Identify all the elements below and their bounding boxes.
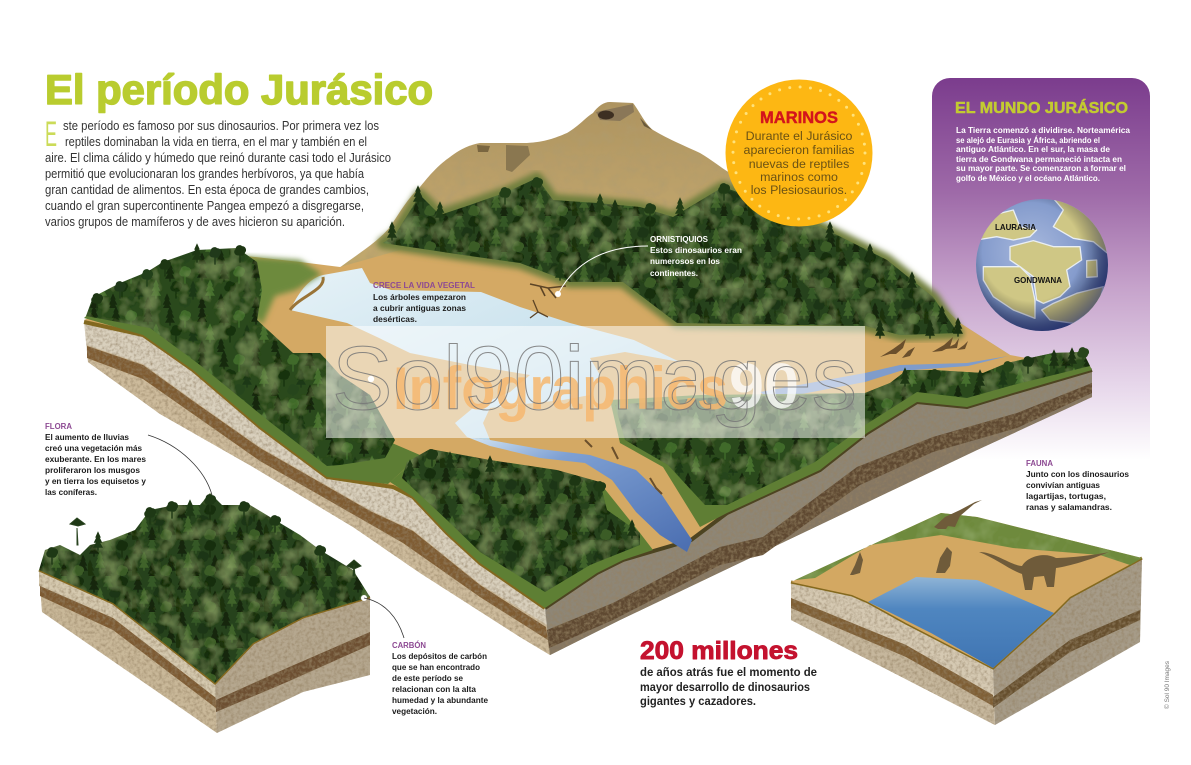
badge text: Durante el Jurásico bbox=[746, 129, 852, 143]
callout: ornistiquios bbox=[555, 234, 742, 297]
callout: 200 millones: gigantes y cazadores. bbox=[640, 694, 756, 708]
panel text block: se alejó de Eurasia y África, abriendo el bbox=[956, 135, 1100, 145]
badge text: marinos como bbox=[760, 170, 838, 184]
globe label: laurasia: LAURASIA bbox=[995, 222, 1036, 232]
callout: crece la vida vegetal bbox=[373, 280, 476, 324]
grass back left bbox=[240, 256, 322, 325]
panel: el mundo jurásico bbox=[932, 78, 1150, 460]
callout: carbón bbox=[364, 598, 488, 716]
callout: flora: las coníferas. bbox=[45, 487, 97, 497]
block right face bbox=[993, 558, 1142, 725]
panel text block: su mayor parte. Se comenzaron a formar el bbox=[956, 163, 1126, 173]
callout: carbón: Los depósitos de carbón bbox=[392, 651, 487, 661]
callout: 200 millones: 200 millones bbox=[640, 637, 798, 665]
block left face bbox=[39, 572, 217, 733]
callout: ornistiquios: numerosos en los bbox=[650, 256, 720, 266]
watermark white number: 90 bbox=[729, 350, 799, 422]
block top surface bbox=[791, 513, 1142, 668]
badge text: aparecieron familias bbox=[744, 143, 854, 157]
intro text block: aire. El clima cálido y húmedo que reinó durante casi todo el Jurásico bbox=[45, 150, 391, 165]
callout: flora: FLORA bbox=[45, 421, 73, 431]
callout: flora: y en tierra los equisetos y bbox=[45, 476, 146, 486]
block right face bbox=[215, 597, 370, 733]
callout: fauna: convivían antiguas bbox=[1026, 480, 1100, 490]
callout: carbón: vegetación. bbox=[392, 706, 437, 716]
intro text block: cuando el gran supercontinente Pangea empezó a disgregarse, bbox=[45, 198, 364, 213]
callout: carbón: relacionan con la alta bbox=[392, 684, 476, 694]
callout: fauna: ranas y salamandras. bbox=[1026, 502, 1112, 512]
badge heading: MARINOS bbox=[760, 109, 838, 127]
intro text block: reptiles dominaban la vida en tierra, en el mar y también en el bbox=[65, 134, 367, 149]
intro text block bbox=[45, 115, 391, 229]
block forest top bbox=[39, 493, 370, 683]
callout: ornistiquios: ORNISTIQUIOS bbox=[650, 234, 708, 244]
intro text block: ste período es famoso por sus dinosaurios. Por primera vez los bbox=[63, 118, 379, 133]
lake edge bank bbox=[290, 277, 323, 310]
marinos badge bbox=[726, 80, 872, 226]
river bbox=[467, 437, 692, 552]
callout: flora: proliferaron los musgos bbox=[45, 465, 140, 475]
callout: carbón: de este período se bbox=[392, 673, 463, 683]
copyright: © Sol 90 Images bbox=[1163, 660, 1171, 709]
callout: ornistiquios: Estos dinosaurios eran bbox=[650, 245, 742, 255]
callout: carbón: humedad y la abundante bbox=[392, 695, 488, 705]
panel text block bbox=[956, 125, 1130, 183]
panel heading: EL MUNDO JURÁSICO bbox=[955, 98, 1128, 117]
title: El período Jurásico bbox=[45, 66, 433, 113]
watermark orange word: Infographics bbox=[393, 355, 728, 422]
drop cap: E bbox=[45, 115, 57, 154]
block lake bbox=[868, 577, 1054, 668]
dinosaurs on the plain bbox=[530, 284, 968, 494]
callout: fauna: Junto con los dinosaurios bbox=[1026, 469, 1129, 479]
watermark bbox=[326, 326, 865, 438]
callout: ornistiquios: continentes. bbox=[650, 268, 698, 278]
intro text block: permitió que evolucionaran los grandes herbívoros, ya que había bbox=[45, 166, 365, 181]
panel text block: La Tierra comenzó a dividirse. Norteamérica bbox=[956, 125, 1130, 135]
callout: fauna bbox=[1026, 458, 1129, 512]
left face strata bbox=[84, 322, 550, 655]
forest: left bank bbox=[84, 243, 420, 484]
block dinosaurs bbox=[850, 500, 1109, 590]
forest: upper slope bbox=[383, 177, 963, 339]
main terrain block bbox=[84, 102, 1092, 655]
globe bbox=[976, 197, 1113, 331]
side river to the east bbox=[760, 356, 1008, 400]
forest: front corner bbox=[390, 449, 653, 608]
callout: flora bbox=[45, 421, 212, 497]
callout: flora: El aumento de lluvias bbox=[45, 432, 129, 442]
block left face bbox=[791, 582, 995, 725]
callout: fauna: FAUNA bbox=[1026, 458, 1054, 468]
panel text block: tierra de Gondwana permaneció intacta en bbox=[956, 154, 1122, 164]
callout: crece la vida vegetal: CRECE LA VIDA VEGETAL bbox=[373, 280, 476, 290]
badge text: nuevas de reptiles bbox=[749, 157, 849, 171]
callout: 200 millones: de años atrás fue el momento de bbox=[640, 665, 817, 679]
callout: flora: exuberante. En los mares bbox=[45, 454, 146, 464]
callout: crece la vida vegetal: a cubrir antiguas zonas bbox=[373, 303, 466, 313]
mountain with volcano bbox=[330, 102, 1010, 400]
callout: crece la vida vegetal: desérticas. bbox=[373, 314, 417, 324]
forest: right side bbox=[610, 347, 1092, 527]
terrain top surface: sand bbox=[84, 250, 1092, 608]
small block: fauna and water bbox=[791, 500, 1142, 725]
badge text: los Plesiosaurios. bbox=[751, 183, 847, 197]
panel text block: golfo de México y el océano Atlántico. bbox=[956, 173, 1100, 183]
block tree line bbox=[46, 494, 361, 576]
callout: carbón: que se han encontrado bbox=[392, 662, 480, 672]
right face strata bbox=[545, 370, 1092, 655]
lake and delta bbox=[290, 268, 680, 440]
callout: carbón: CARBÓN bbox=[392, 639, 426, 650]
callout: flora: creó una vegetación más bbox=[45, 443, 142, 453]
small block: flora and coal bbox=[39, 493, 370, 733]
watermark outlined word: Sol90images bbox=[332, 329, 857, 429]
panel text block: antiguo Atlántico. En el sur, la masa de bbox=[956, 144, 1110, 154]
globe label: gondwana: GONDWANA bbox=[1014, 275, 1062, 285]
callout: 200 millones bbox=[640, 637, 817, 708]
badge text bbox=[744, 129, 854, 197]
intro text block: varios grupos de mamíferos y de aves hicieron su aparición. bbox=[45, 214, 345, 229]
callout: 200 millones: mayor desarrollo de dinosaurios bbox=[640, 680, 810, 694]
block grass bbox=[795, 513, 1142, 580]
callout: crece la vida vegetal: Los árboles empezaron bbox=[373, 292, 466, 302]
callout: fauna: lagartijas, tortugas, bbox=[1026, 491, 1106, 501]
intro text block: gran cantidad de alimentos. En esta época de grandes cambios, bbox=[45, 182, 369, 197]
